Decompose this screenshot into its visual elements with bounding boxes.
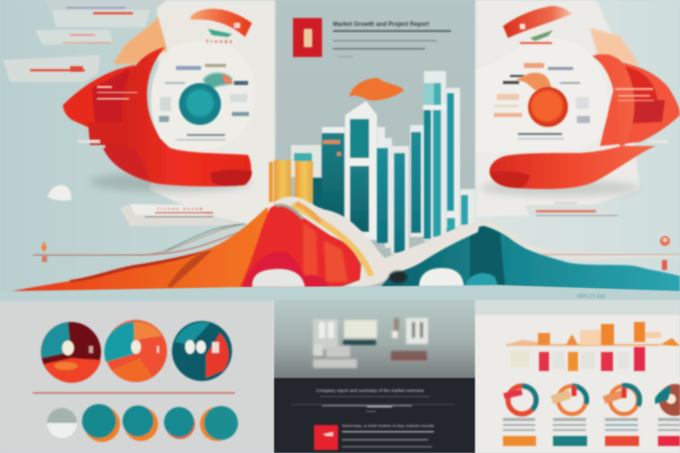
text: red wing caption left — [97, 86, 137, 100]
node: teal circle one — [82, 404, 120, 442]
chart: teal mountain — [378, 220, 680, 292]
label: right tags — [494, 63, 590, 140]
node: teal circle two — [122, 406, 158, 441]
button: orange — [503, 436, 536, 446]
chart: skyline bar chart — [269, 71, 475, 254]
chart: teal circle — [179, 83, 221, 125]
panel: left stacked label cards — [3, 0, 167, 82]
bar: right slim teal — [446, 88, 460, 232]
icon: orange flag — [349, 78, 404, 100]
icon: ring three — [604, 386, 640, 414]
chart: orange step bars — [506, 322, 680, 346]
chart: teal circle centre — [186, 89, 214, 117]
label: red heading: Trends — [206, 39, 232, 44]
block: orange right panel — [324, 240, 348, 282]
text: dark panel paragraph — [342, 423, 434, 448]
bar: teal with white cap — [410, 125, 426, 237]
panel: left peach ribbon backing — [113, 15, 168, 64]
icon: left red ribbon banner — [157, 9, 252, 52]
bar: narrow teal — [377, 127, 392, 248]
icon: white pebble — [48, 185, 71, 201]
icon: orange tip above circle — [222, 74, 233, 84]
bar: tall white-framed teal — [345, 101, 377, 240]
panel: left white sheet — [150, 0, 275, 225]
text: column captions — [503, 418, 680, 431]
panel: centre red square icon — [293, 18, 322, 57]
label: bottom right caption: WPS 21 034 — [577, 294, 605, 300]
panel: right red crescent infographic — [490, 54, 680, 189]
icon: right red ribbon banner — [503, 6, 572, 38]
icon: orange bird shape — [516, 73, 552, 90]
divider: red timeline — [33, 392, 235, 394]
icon: ring two — [552, 386, 587, 414]
panel: bottom-left note card: Trends Ahead — [157, 206, 203, 211]
chart: lower coloured bars — [510, 347, 645, 371]
bar: tallest teal — [423, 71, 447, 241]
panel: bottom-centre gallery — [274, 300, 475, 453]
background: right pale wall — [475, 0, 680, 300]
wave: dark teal slab — [470, 226, 505, 285]
pie: second donut — [104, 320, 167, 382]
background: centre grey panel — [275, 0, 475, 300]
icon: white dome left — [252, 269, 305, 287]
button: teal — [553, 436, 587, 446]
text: centre heading block — [333, 22, 451, 57]
node: white half circle — [47, 408, 77, 438]
pie: third donut — [172, 321, 232, 381]
cards: photo thumbnails — [313, 318, 428, 368]
icon: white dome right — [419, 268, 464, 287]
icon: right marker pin — [540, 236, 680, 270]
icon: red square — [314, 425, 338, 450]
wave: light base — [465, 273, 498, 286]
bar: short teal — [460, 189, 475, 227]
text: red wing caption right — [615, 88, 654, 101]
bar: medium teal — [391, 146, 409, 254]
block: crimson arch — [243, 252, 330, 287]
chart: orange circle — [528, 87, 568, 127]
icon: ring one — [504, 386, 536, 414]
wave: white and yellow crest — [272, 197, 480, 288]
icon: left marker pin — [41, 241, 47, 262]
chart: red mountain blocks — [240, 202, 361, 287]
bar: dark teal — [313, 127, 345, 218]
panel: bottom-right report — [475, 300, 680, 453]
chart: orange mountain — [12, 207, 290, 291]
label: right panel heading — [520, 30, 553, 44]
icon: teal blob above circle — [203, 73, 232, 90]
ridge: dark red edge — [70, 251, 205, 282]
shadow: right red crescent — [480, 180, 640, 196]
chart: left trend lines — [33, 224, 245, 255]
icon: green mini chart — [208, 29, 232, 37]
panel: right white circle — [476, 38, 608, 152]
icon: dark gap — [389, 271, 407, 283]
base: ground strip — [0, 285, 680, 300]
pie: first donut — [41, 322, 101, 383]
text: dark panel lines — [290, 396, 455, 412]
panel: bottom-left circles — [0, 302, 273, 453]
text: centre heading block: Market Growth and Project Report — [333, 22, 429, 28]
chart: orange circle centre — [531, 90, 563, 122]
gap strip between panels — [273, 300, 276, 453]
label: small tags — [159, 64, 249, 140]
button: red orange — [605, 436, 639, 446]
panel: right peach ribbon backing — [590, 28, 640, 66]
icon: ring four — [655, 384, 680, 416]
background: left teal wall — [0, 0, 276, 300]
node: teal circle three — [164, 407, 195, 439]
button: red — [658, 436, 680, 446]
chart: right orange diagram — [494, 30, 590, 140]
node: teal circle four — [200, 406, 238, 441]
block: orange inner panel — [303, 222, 318, 278]
panel: right white sheet — [476, 0, 640, 217]
panel: bottom-left note card — [120, 204, 245, 226]
ridge: orange fold — [167, 250, 212, 287]
text: dark panel heading: Company report and summary of the market overview — [316, 388, 425, 393]
wave: pale crest — [430, 220, 680, 260]
text: dark panel paragraph: Summary: a brief review of key market results — [342, 423, 434, 428]
shadow: left red crescent — [90, 172, 250, 192]
panel: right note card — [525, 202, 618, 217]
panel: left red crescent infographic — [63, 47, 252, 186]
panel: left white circular diagram — [151, 29, 255, 150]
bar: yellow stack — [269, 145, 321, 205]
